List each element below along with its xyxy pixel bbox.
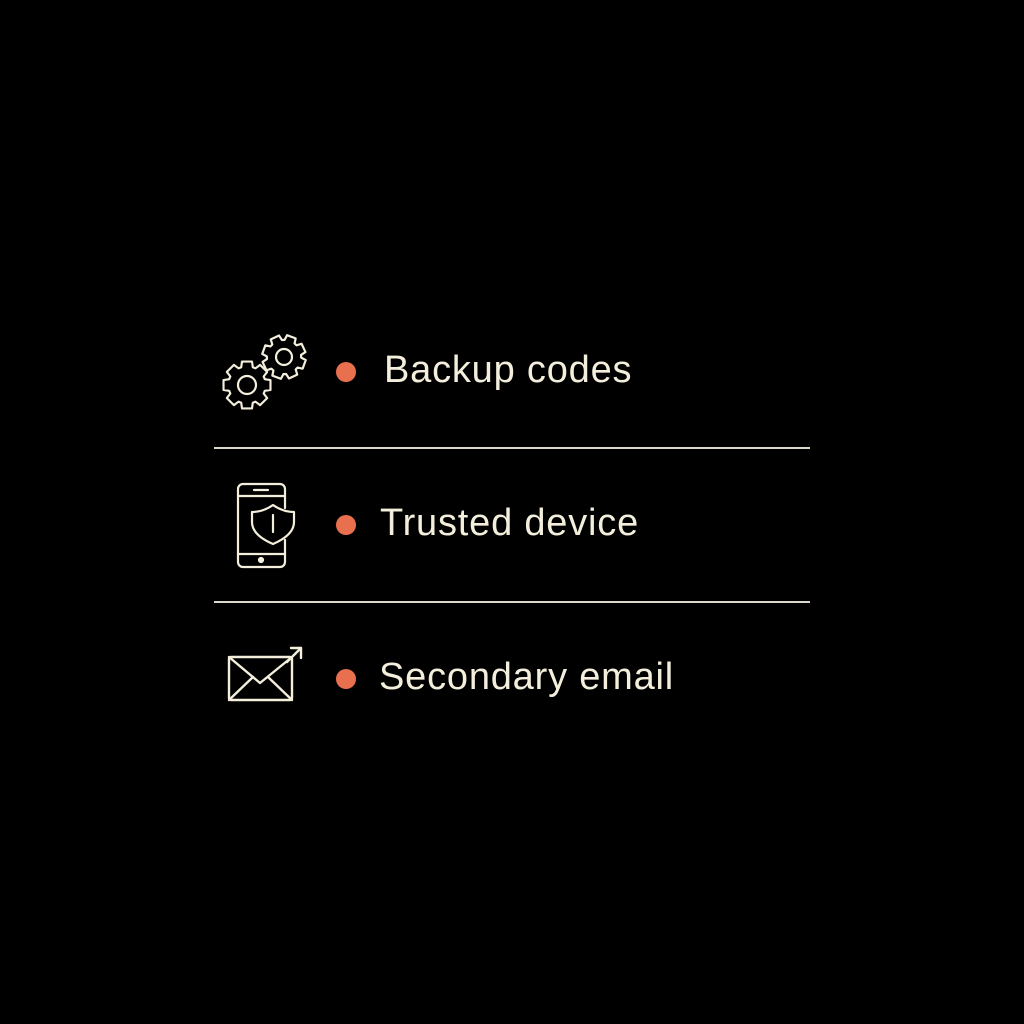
dividers (214, 447, 810, 449)
icon: gears (224, 329, 312, 408)
bullets (336, 362, 356, 689)
label: Secondary email: Secondary email (379, 656, 674, 698)
icon: phone with shield (238, 484, 294, 567)
icon: envelope with arrow (229, 648, 301, 700)
label: Backup codes: Backup codes (384, 349, 632, 391)
label: Trusted device: Trusted device (380, 502, 639, 544)
